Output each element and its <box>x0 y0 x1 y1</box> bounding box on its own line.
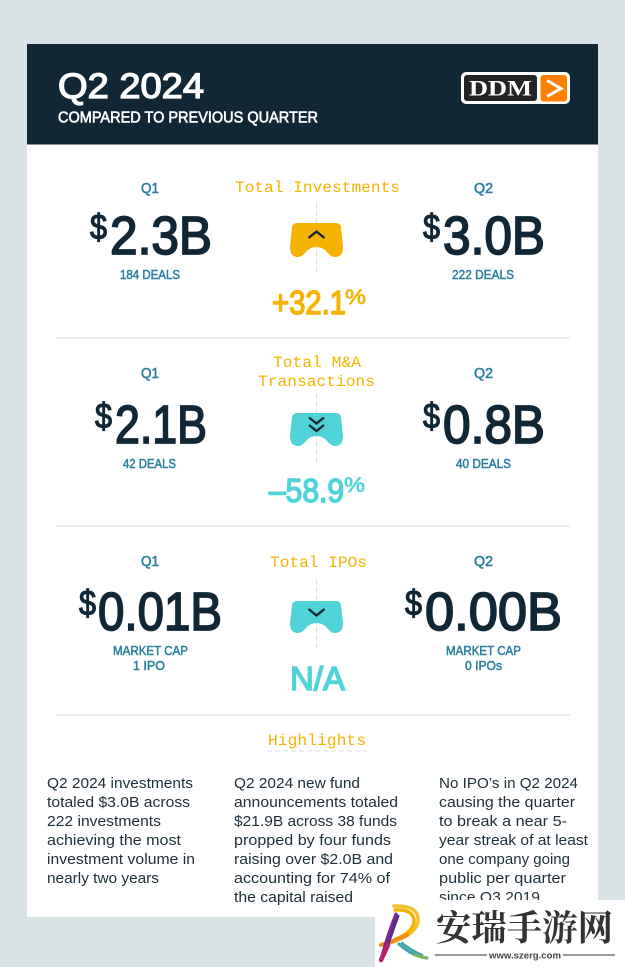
Q2 value: $ <box>405 584 422 623</box>
Q2 value: $ <box>423 397 440 436</box>
panel: total M&A transactions: Transactions <box>258 373 375 391</box>
heading: Total Investments <box>235 179 400 197</box>
Q1 label: Q1 <box>141 554 159 570</box>
Q2 value: 0.8B <box>443 395 545 455</box>
Q2 market cap: 0 IPOs <box>465 659 502 673</box>
change percent: –58.9 <box>269 472 344 509</box>
Q2 deals: 40 DEALS <box>456 457 511 471</box>
Q2 deals: 222 DEALS <box>452 268 514 282</box>
Q2 label: Q2 <box>474 554 493 570</box>
Q1 value: $ <box>79 584 96 623</box>
text block: IPO highlight: causing the quarter <box>439 795 575 811</box>
text block: investments highlight: achieving the most <box>47 833 181 849</box>
watermark <box>375 900 625 967</box>
Q2 value: $ <box>423 208 440 247</box>
Q1 market cap <box>113 644 188 673</box>
text block: investments highlight: Q2 2024 investments <box>47 776 193 792</box>
title: Q2 2024 <box>58 67 204 106</box>
panel: total IPOs <box>79 554 562 697</box>
change percent: +32.1 <box>272 284 346 321</box>
text block: fund announcements highlight: raising over $2.0B and <box>234 852 393 868</box>
Q1 value: 2.3B <box>110 206 212 266</box>
text block: IPO highlight: public per quarter <box>439 871 566 887</box>
Q1 deals: 184 DEALS <box>120 268 180 282</box>
text block: investments highlight: totaled $3.0B across <box>47 795 190 811</box>
text block: fund announcements highlight: announcements totaled <box>234 795 398 811</box>
Q2 label: Q2 <box>474 366 493 382</box>
text block: fund announcements highlight: propped by four funds <box>234 833 391 849</box>
heading: highlights: Highlights <box>268 732 366 750</box>
Q1 value: 2.1B <box>115 395 207 455</box>
text block: fund announcements highlight: $21.9B across 38 funds <box>234 814 397 830</box>
text block: IPO highlight <box>439 776 588 906</box>
icon: DDM logo <box>461 72 570 104</box>
Q1 value: $ <box>95 397 112 436</box>
icon: down chevron badge <box>290 601 343 633</box>
panel: white card <box>27 144 598 917</box>
icon: DDM logo: DDM <box>469 76 532 100</box>
text block: investments highlight <box>47 776 195 887</box>
Q2 market cap <box>446 644 521 673</box>
watermark url: www.szerg.com <box>488 950 561 962</box>
watermark name: 安瑞手游网 <box>436 908 613 948</box>
Q1 deals: 42 DEALS <box>123 457 176 471</box>
Q1 value: $ <box>90 208 107 247</box>
change value: N/A <box>290 660 345 697</box>
change percent: % <box>344 474 365 497</box>
icon: watermark R logo <box>381 906 427 960</box>
text block: IPO highlight: since Q3 2019 <box>439 890 540 906</box>
icon: up chevron badge <box>290 223 343 257</box>
Q1 market cap: 1 IPO <box>133 659 165 673</box>
Q2 value: 0.00B <box>425 582 562 642</box>
text block: investments highlight: 222 investments <box>47 814 161 830</box>
text block: IPO highlight: to break a near 5- <box>439 814 567 830</box>
Q1 market cap: MARKET CAP <box>113 644 188 658</box>
panel: total investments <box>90 179 545 321</box>
heading: Total IPOs <box>270 554 367 572</box>
text block: investments highlight: investment volume in <box>47 852 195 868</box>
icon: double down chevron badge <box>290 413 343 446</box>
change percent: % <box>345 286 366 309</box>
panel: total M&A transactions <box>95 354 545 509</box>
text block: fund announcements highlight: the capital raised <box>234 890 353 906</box>
Q1 value: 0.01B <box>98 582 222 642</box>
text block: IPO highlight: one company going <box>439 852 570 868</box>
Q2 value: 3.0B <box>443 206 545 266</box>
Q1 label: Q1 <box>141 366 159 382</box>
Q2 label: Q2 <box>474 181 493 197</box>
text block: fund announcements highlight: Q2 2024 new fund <box>234 776 360 792</box>
Q1 label: Q1 <box>141 181 159 197</box>
text block: fund announcements highlight: accounting for 74% of <box>234 871 391 887</box>
text block: IPO highlight: year streak of at least <box>439 833 588 849</box>
subtitle: COMPARED TO PREVIOUS QUARTER <box>58 110 318 126</box>
text block: investments highlight: nearly two years <box>47 871 159 887</box>
text block: fund announcements highlight <box>234 776 398 906</box>
header band <box>27 44 598 144</box>
Q2 market cap: MARKET CAP <box>446 644 521 658</box>
text block: IPO highlight: No IPO’s in Q2 2024 <box>439 776 578 792</box>
heading: Total M&A <box>273 354 362 372</box>
